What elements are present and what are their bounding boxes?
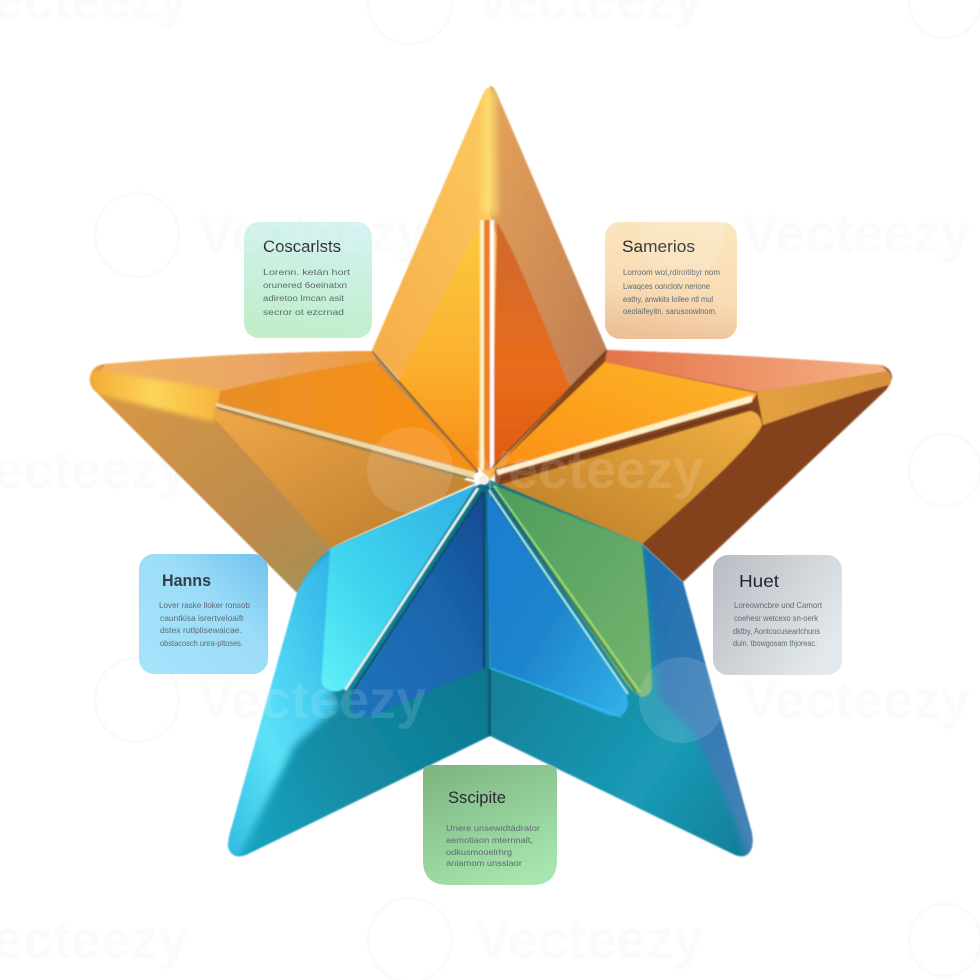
card: Coscarlsts: secror ot ezcrnad [263, 307, 344, 317]
card: Huet: coehesr wetcexo sn-oerk [734, 613, 819, 623]
card: Sscipite: odkusmooelrhrg [446, 847, 512, 857]
card: Huet: dktby, Aonlcocusearlchuns [733, 626, 820, 636]
card: Huet: Loreowncbre und Camort [734, 600, 823, 610]
card: Coscarlsts [244, 222, 372, 338]
left point of star [84, 351, 478, 593]
card: Sscipite: aniamom unsslaor [446, 858, 522, 868]
background watermarks: Vecteezy [742, 670, 970, 730]
card: Sscipite [423, 765, 557, 885]
background watermarks: Vecteezy [198, 670, 426, 730]
card: Coscarlsts: adiretoo lmcan asit [263, 293, 345, 303]
background watermarks: Vecteezy [742, 204, 970, 264]
card: Coscarlsts: Lorenn. ketán hort [263, 267, 351, 277]
facet: dark blue panel [351, 492, 484, 717]
facet: green panel [494, 485, 652, 697]
facet highlights [345, 486, 640, 717]
right point of star [492, 350, 892, 582]
card: Huet [713, 555, 842, 675]
background watermarks: Vecteezy [198, 204, 426, 264]
overlay watermarks: Vecteezy [198, 204, 426, 264]
card: Sscipite: Unere unsewidtádrator [446, 823, 540, 833]
card: Coscarlsts: Coscarlsts [263, 238, 341, 256]
card: Coscarlsts: orunered 6oeinatxn [263, 280, 347, 290]
overlay watermarks: Vecteezy [198, 670, 426, 730]
background watermarks: Vecteezy [475, 910, 703, 970]
card: Samerios: Lwaqces oonclotv nerione [623, 281, 710, 291]
overlay watermarks: Vecteezy [475, 440, 703, 500]
facet: bright blue panel [487, 492, 628, 716]
card: Hanns: cauntkisa isrertveloaifr [160, 613, 244, 623]
facet: cyan panel [321, 485, 476, 692]
card: Sscipite: aemotiaon mternnalt, [446, 835, 533, 845]
star centre point [479, 475, 489, 485]
card: Hanns: Hanns [162, 572, 211, 590]
card: Sscipite: Sscipite [448, 789, 506, 807]
overlay watermarks [198, 192, 725, 743]
left lower leg of star [215, 480, 490, 865]
card: Samerios: Samerios [622, 238, 695, 256]
card: Hanns: obstacosch unra-pltoses. [160, 638, 243, 648]
card: Hanns [139, 554, 268, 674]
card: Huet: duin. tbowgosam thjoreac. [733, 638, 817, 648]
card: Samerios: eathy, anwkits loilee ntl mul [623, 294, 713, 304]
card: Hanns: Lover raske lloker ronsob [159, 600, 250, 610]
card: Samerios: Lorroom wot,rdiroitibyr nom [623, 267, 720, 277]
star graphic [84, 86, 892, 865]
right lower leg of star [488, 480, 760, 858]
card: Hanns: dstex rutlplisewaicae. [160, 625, 242, 635]
card: Huet: Huet [739, 571, 779, 591]
card: Samerios [605, 222, 737, 339]
top point of star [372, 86, 607, 480]
card: Samerios: oeolaifeyitn. sarusoowlnom. [623, 306, 717, 316]
